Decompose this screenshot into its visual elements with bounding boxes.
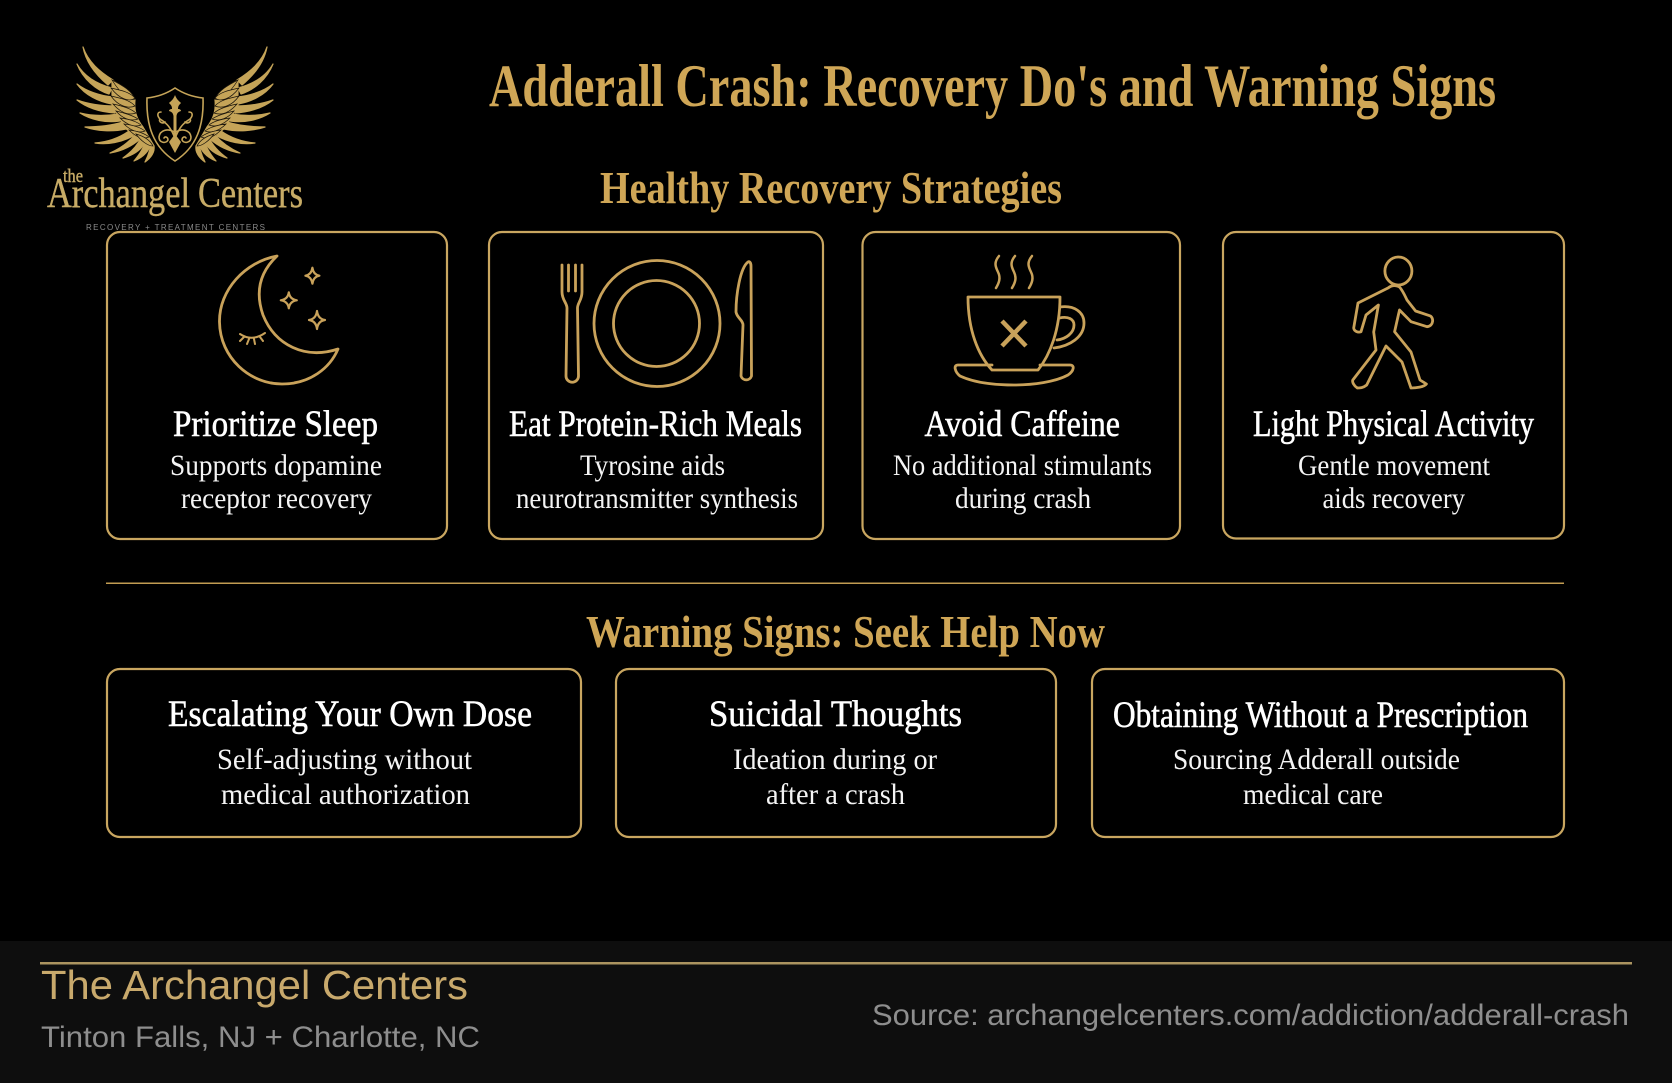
- logo: The Archangel Centers: [47, 47, 303, 232]
- icon: right wing: [196, 47, 273, 162]
- icon: left wing: [77, 47, 154, 162]
- text: escalating your own dose: medical authorization: [221, 778, 470, 811]
- panel: prioritize sleep: [107, 232, 447, 539]
- text: eat protein-rich meals: neurotransmitter synthesis: [516, 482, 798, 515]
- heading: warning signs: Warning Signs: Seek Help Now: [586, 606, 1105, 657]
- text: eat protein-rich meals: Tyrosine aids: [580, 449, 725, 482]
- text: light physical activity: [1253, 404, 1534, 515]
- text: escalating your own dose: Escalating Your Own Dose: [168, 694, 532, 735]
- text: suicidal thoughts: [709, 694, 962, 811]
- text: suicidal thoughts: after a crash: [766, 778, 905, 811]
- text: avoid caffeine: [893, 404, 1152, 515]
- icon: crescent moon with stars: [219, 256, 338, 384]
- panel: avoid caffeine: [862, 232, 1180, 539]
- text: eat protein-rich meals: Eat Protein-Rich Meals: [509, 404, 802, 445]
- icon: plate with fork and knife: [562, 260, 752, 386]
- text: light physical activity: Gentle movement: [1298, 449, 1491, 482]
- text: obtaining without a prescription: [1113, 695, 1528, 811]
- panel: escalating your own dose: [107, 669, 581, 837]
- logo wordmark: the: [63, 166, 83, 187]
- logo wordmark: Centers: [198, 171, 303, 217]
- text: obtaining without a prescription: medical care: [1243, 778, 1383, 811]
- footer: source: Source: archangelcenters.com/addiction/adderall-crash: [872, 999, 1629, 1032]
- text: eat protein-rich meals: [509, 404, 802, 515]
- text: suicidal thoughts: Suicidal Thoughts: [709, 694, 962, 735]
- text: light physical activity: aids recovery: [1322, 482, 1465, 515]
- icon: shield with fleur ornament: [147, 88, 203, 161]
- logo wordmark: [47, 166, 303, 217]
- footer: organization name: The Archangel Centers: [41, 962, 468, 1008]
- icon: coffee cup with x: [955, 256, 1084, 385]
- text: escalating your own dose: Self-adjusting without: [217, 743, 473, 776]
- text: escalating your own dose: [168, 694, 532, 811]
- text: obtaining without a prescription: Sourcing Adderall outside: [1173, 743, 1460, 776]
- text: avoid caffeine: Avoid Caffeine: [924, 404, 1120, 445]
- text: avoid caffeine: No additional stimulants: [893, 449, 1152, 482]
- logo tagline: RECOVERY + TREATMENT CENTERS: [86, 223, 265, 232]
- logo wordmark: Archangel: [47, 171, 190, 217]
- panel: light physical activity: [1223, 232, 1564, 538]
- text: prioritize sleep: [170, 404, 382, 515]
- text: suicidal thoughts: Ideation during or: [733, 743, 937, 776]
- footer: [0, 941, 1672, 1083]
- icon: walking person: [1353, 257, 1433, 388]
- text: avoid caffeine: during crash: [955, 482, 1091, 515]
- text: prioritize sleep: Prioritize Sleep: [173, 404, 378, 445]
- heading: healthy recovery strategies: Healthy Recovery Strategies: [600, 162, 1062, 213]
- panel: obtaining without a prescription: [1092, 669, 1564, 837]
- text: obtaining without a prescription: Obtaining Without a Prescription: [1113, 695, 1528, 736]
- panel: eat protein-rich meals: [489, 232, 823, 539]
- text: light physical activity: Light Physical Activity: [1253, 404, 1534, 445]
- footer: locations: Tinton Falls, NJ + Charlotte, NC: [41, 1021, 480, 1054]
- text: prioritize sleep: Supports dopamine: [170, 449, 382, 482]
- panel: suicidal thoughts: [616, 669, 1056, 837]
- text: prioritize sleep: receptor recovery: [181, 482, 372, 515]
